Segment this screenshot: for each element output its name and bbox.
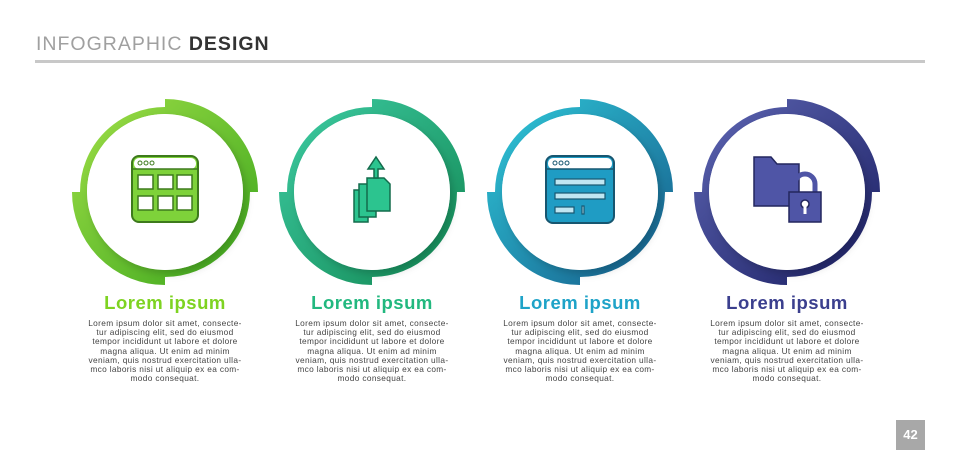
title underline (35, 60, 925, 63)
column 3 text: mco laboris nisi ut aliquip ex ea com- (505, 364, 655, 374)
column 1 text: veniam, quis nostrud exercitation ulla- (89, 355, 241, 365)
icon: upload files (354, 157, 390, 222)
circle 2 (286, 106, 458, 278)
column 2 text: veniam, quis nostrud exercitation ulla- (296, 355, 448, 365)
circle 1 (80, 106, 250, 278)
column 2 text: magna aliqua. Ut enim ad minim (307, 346, 437, 356)
column 2 text: tur adipiscing elit, sed do eiusmod (303, 327, 441, 337)
column 1 text: tempor incididunt ut labore et dolore (92, 336, 238, 346)
column 3 text: Lorem ipsum (519, 292, 641, 313)
column 4 text: mco laboris nisi ut aliquip ex ea com- (712, 364, 862, 374)
column 4 text: magna aliqua. Ut enim ad minim (722, 346, 852, 356)
column 1 text: tur adipiscing elit, sed do eiusmod (96, 327, 234, 337)
circle 4 (702, 106, 872, 278)
column 3 text: magna aliqua. Ut enim ad minim (515, 346, 645, 356)
column 2 text: tempor incididunt ut labore et dolore (299, 336, 445, 346)
column 4 text: tempor incididunt ut labore et dolore (714, 336, 860, 346)
column 2 text: Lorem ipsum (311, 292, 433, 313)
column 3 text: tempor incididunt ut labore et dolore (507, 336, 653, 346)
column 2 text: modo consequat. (338, 373, 406, 383)
column 4 text: Lorem ipsum dolor sit amet, consecte- (710, 318, 864, 328)
title: INFOGRAPHIC DESIGN (36, 33, 270, 55)
page number: 42 (903, 427, 918, 442)
column 2 text (295, 292, 449, 383)
circle 3 (494, 106, 666, 278)
page number (896, 420, 925, 450)
column 3 text (503, 292, 657, 383)
column 1 text (88, 292, 242, 383)
column 1 text: magna aliqua. Ut enim ad minim (100, 346, 230, 356)
column 1 text: modo consequat. (131, 373, 199, 383)
icon: locked folder (754, 157, 821, 222)
column 4 text: Lorem ipsum (726, 292, 848, 313)
column 3 text: modo consequat. (546, 373, 614, 383)
column 2 text: mco laboris nisi ut aliquip ex ea com- (297, 364, 447, 374)
icon: form window (546, 156, 614, 223)
column 4 text (710, 292, 864, 383)
icon: grid window (132, 156, 198, 222)
column 1 text: Lorem ipsum dolor sit amet, consecte- (88, 318, 242, 328)
column 4 text: tur adipiscing elit, sed do eiusmod (718, 327, 856, 337)
column 4 text: veniam, quis nostrud exercitation ulla- (711, 355, 863, 365)
column 2 text: Lorem ipsum dolor sit amet, consecte- (295, 318, 449, 328)
column 1 text: mco laboris nisi ut aliquip ex ea com- (90, 364, 240, 374)
column 4 text: modo consequat. (753, 373, 821, 383)
column 3 text: Lorem ipsum dolor sit amet, consecte- (503, 318, 657, 328)
column 3 text: veniam, quis nostrud exercitation ulla- (504, 355, 656, 365)
column 1 text: Lorem ipsum (104, 292, 226, 313)
column 3 text: tur adipiscing elit, sed do eiusmod (511, 327, 649, 337)
